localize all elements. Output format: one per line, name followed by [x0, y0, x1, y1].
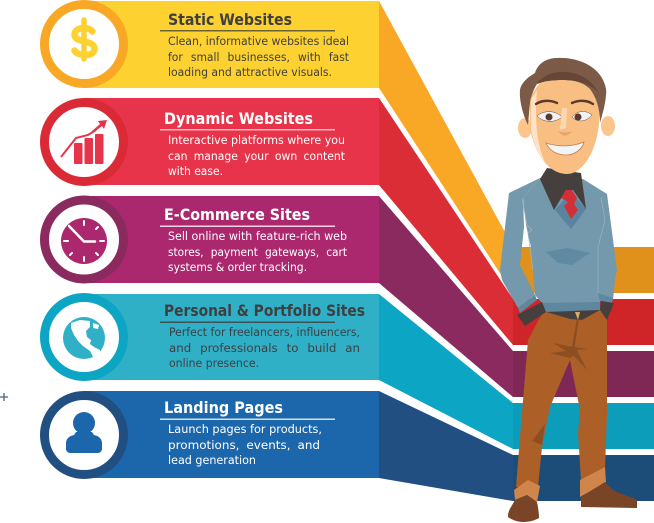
- text block: static websites description: Clean, informative websites ideal: [168, 34, 349, 48]
- man: pockets and belt: [517, 301, 614, 326]
- icon: rising bar chart in ring: [44, 102, 124, 182]
- heading: personal and portfolio sites: Personal & Portfolio Sites: [164, 301, 365, 320]
- text block: static websites description: [168, 34, 349, 79]
- man: smile: [546, 142, 584, 155]
- heading rule: [160, 322, 335, 323]
- man: neck and collar: [540, 168, 586, 229]
- text block: landing pages description: lead generation: [168, 453, 256, 467]
- text block: personal description: and professionals to build an: [169, 341, 360, 355]
- text block: personal description: [169, 325, 360, 370]
- ribbon: purple perspective band: [84, 196, 654, 397]
- text block: static websites description: loading and attractive visuals.: [168, 65, 332, 79]
- text block: dynamic websites description: can manage your own content: [168, 149, 346, 163]
- heading rule: [160, 30, 335, 32]
- text block: personal description: Perfect for freelancers, influencers,: [169, 325, 360, 339]
- ribbon: red perspective band: [84, 98, 654, 345]
- text block: dynamic websites description: Interactive platforms where you: [168, 133, 345, 147]
- man: ears: [518, 116, 615, 138]
- panel: static websites: [44, 1, 654, 293]
- text block: e-commerce description: Sell online with feature-rich web: [168, 229, 347, 243]
- text block: landing pages description: promotions, events, and: [168, 438, 320, 452]
- text block: landing pages description: [168, 422, 322, 467]
- heading: landing pages: Landing Pages: [164, 398, 283, 417]
- ribbon: teal perspective band: [84, 294, 654, 449]
- panel: personal and portfolio sites: [44, 294, 654, 449]
- heading rule: [160, 418, 335, 420]
- heading: dynamic websites: Dynamic Websites: [164, 109, 313, 128]
- panel: dynamic websites: [44, 98, 654, 345]
- icon: globe in ring: [44, 298, 124, 376]
- man: head: [520, 58, 606, 174]
- text block: dynamic websites description: with ease.: [168, 164, 223, 178]
- text block: landing pages description: Launch pages for products,: [168, 422, 322, 436]
- icon: person in ring: [44, 396, 124, 474]
- man: trousers: [516, 310, 607, 487]
- panel: e-commerce sites: [44, 196, 654, 397]
- man: sweater arms and torso: [500, 178, 617, 313]
- text block: dynamic websites description: [168, 133, 346, 178]
- text block: personal description: online presence.: [169, 356, 259, 370]
- icon: dollar sign in ring: [44, 4, 124, 84]
- text block: e-commerce description: stores, payment gateways, cart: [168, 245, 347, 259]
- man: nose: [558, 108, 572, 136]
- heading rule: [160, 226, 335, 227]
- man: shoes: [508, 482, 637, 522]
- man: eyebrows: [536, 101, 593, 104]
- ribbon: yellow perspective band: [84, 1, 654, 293]
- icon: clock in ring: [44, 200, 124, 279]
- text block: static websites description: for small businesses, with fast: [168, 50, 349, 64]
- man: trouser creases: [532, 318, 588, 445]
- panel: landing pages: [44, 391, 654, 501]
- ribbon: blue perspective band: [84, 391, 654, 501]
- heading rule: [160, 129, 335, 130]
- man: trouser cuffs: [514, 467, 606, 502]
- text block: e-commerce description: [168, 229, 347, 274]
- heading: e-commerce sites: E-Commerce Sites: [164, 205, 310, 224]
- man: eyes: [537, 111, 592, 121]
- small plus mark: [0, 393, 8, 401]
- heading: static websites: Static Websites: [168, 10, 292, 29]
- text block: e-commerce description: systems & order tracking.: [168, 260, 307, 274]
- illustration: smiling man: [500, 58, 637, 522]
